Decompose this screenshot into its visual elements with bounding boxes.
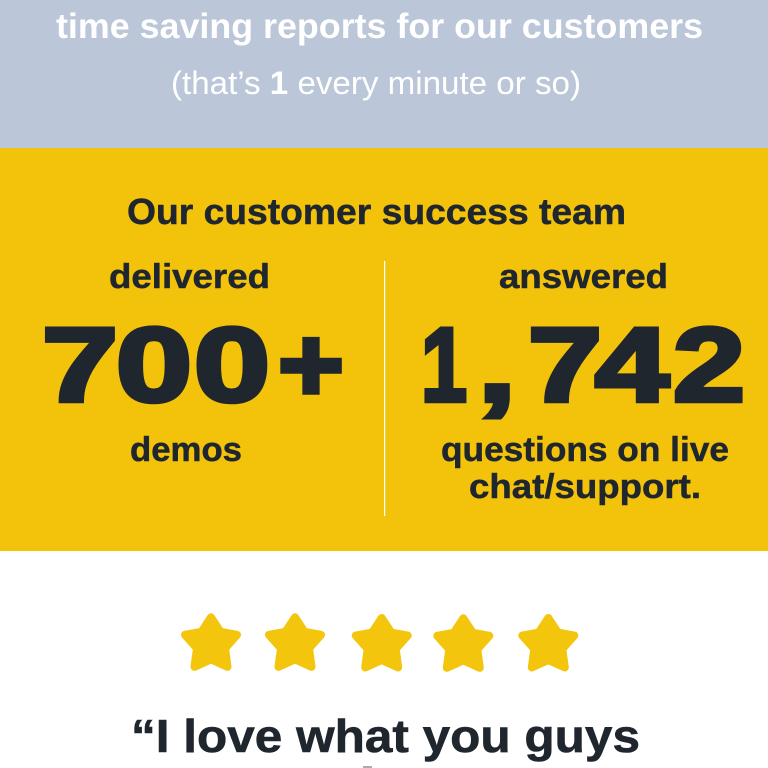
stat: 700+: + xyxy=(278,307,344,424)
panel: testimonial xyxy=(0,551,768,768)
panel: customer success team xyxy=(0,148,768,551)
panel: top reports banner xyxy=(0,0,768,148)
label: answered: answered xyxy=(499,258,668,296)
label: delivered: delivered xyxy=(109,258,270,296)
text: one every minute: (that’s 1 every minute or so) xyxy=(171,65,581,101)
quote text: “I love what you guys xyxy=(131,710,640,762)
stat: 1,742: 1 xyxy=(421,307,467,424)
stat: 1,742 xyxy=(421,307,745,424)
stat: 1,742: 4 xyxy=(595,307,669,424)
heading: our customer success team: Our customer success team xyxy=(127,191,626,232)
stat: 700+: 0 xyxy=(194,307,270,424)
text: questions on live chat/support: chat/support. xyxy=(469,468,701,506)
stat: 700+ xyxy=(42,307,344,424)
stat: 1,742: , xyxy=(478,307,516,424)
heading: time saving reports: time saving reports for our customers xyxy=(56,7,703,46)
icon: five star rating xyxy=(185,617,574,668)
divider xyxy=(384,261,385,516)
text: questions on live chat/support: questions on live xyxy=(441,431,729,469)
text: questions on live chat/support xyxy=(441,431,729,506)
stat: 700+: 7 xyxy=(42,307,118,424)
stat: 1,742: 2 xyxy=(673,307,745,424)
stat: 700+: 0 xyxy=(116,307,192,424)
label: demos: demos xyxy=(130,431,242,469)
stat: 1,742: 7 xyxy=(528,307,602,424)
